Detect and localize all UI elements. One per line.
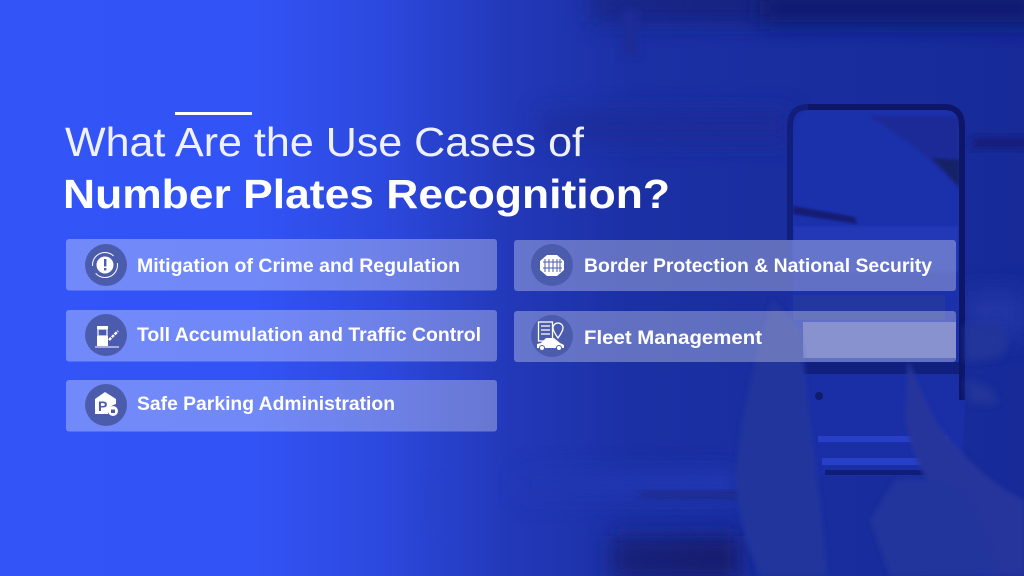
icon: secure parking xyxy=(85,384,127,426)
icon: fleet car and checklist xyxy=(531,315,573,357)
panel: Toll Accumulation and Traffic Control xyxy=(66,310,497,362)
background photo: phone scanning a car xyxy=(283,0,1024,576)
panel: Safe Parking Administration: Safe Parking Administration xyxy=(137,393,395,415)
heading: What Are the Use Cases of xyxy=(65,119,585,165)
icon: toll booth xyxy=(85,314,127,356)
heading: Number Plates Recognition? xyxy=(63,171,670,217)
panel: Mitigation of Crime and Regulation: Mitigation of Crime and Regulation xyxy=(137,255,460,277)
icon: secure parking: P xyxy=(98,398,107,414)
panel: Toll Accumulation and Traffic Control: Toll Accumulation and Traffic Control xyxy=(137,324,481,346)
panel: Safe Parking Administration xyxy=(66,380,497,432)
title accent line xyxy=(175,112,252,115)
panel: Border Protection & National Security: Border Protection & National Security xyxy=(584,255,932,277)
phone xyxy=(736,104,1024,576)
panel: Border Protection & National Security xyxy=(514,240,956,291)
icon: crime alert xyxy=(85,244,127,286)
panel: Mitigation of Crime and Regulation xyxy=(66,239,497,290)
heading xyxy=(63,119,670,217)
icon: border fence xyxy=(531,244,573,286)
panel: Fleet Management xyxy=(514,311,956,362)
panel: Fleet Management: Fleet Management xyxy=(584,327,763,349)
